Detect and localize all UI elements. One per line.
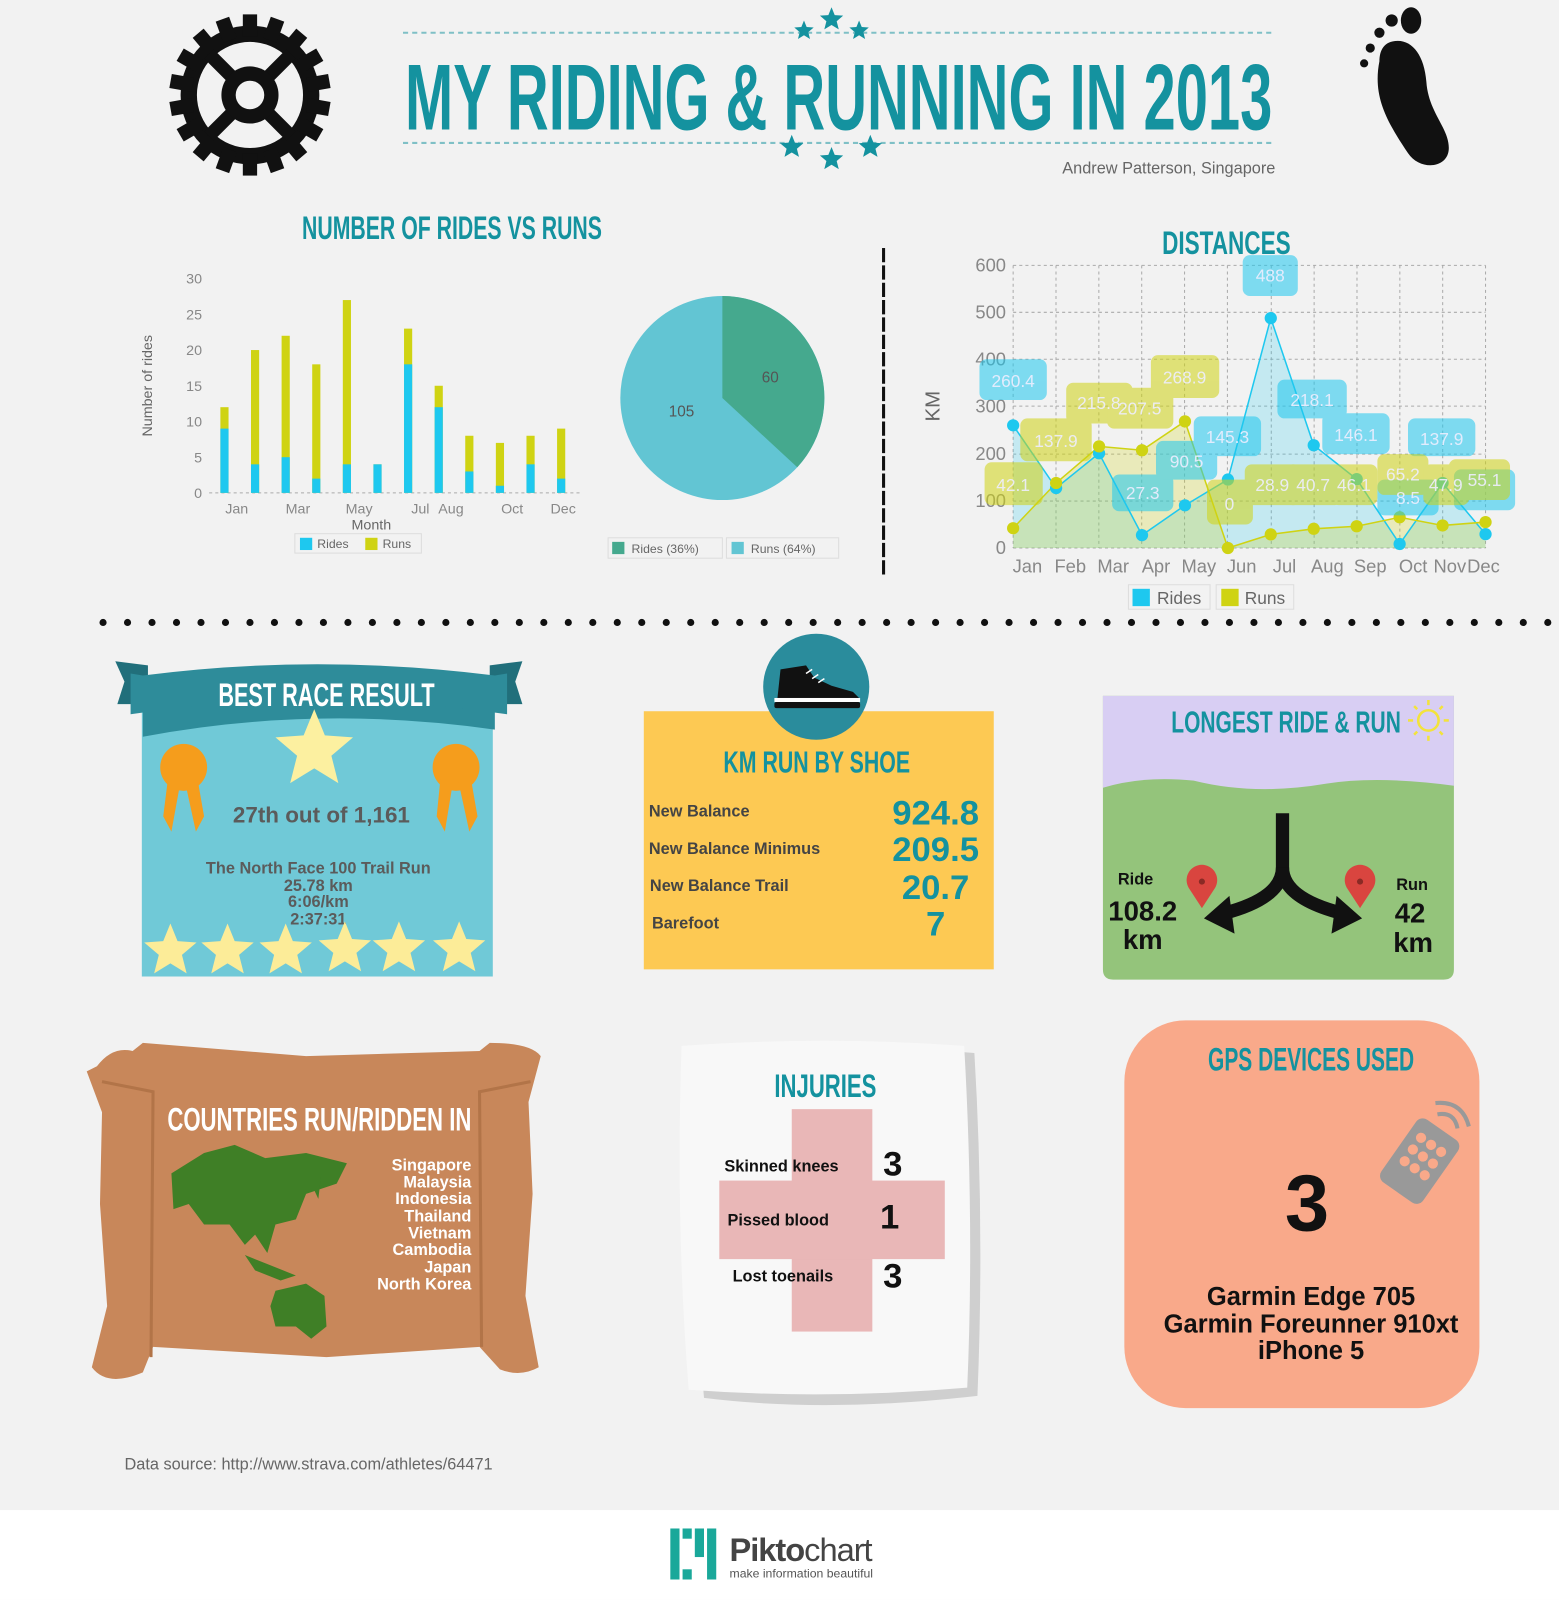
bar chart: Rides — [317, 537, 349, 551]
panel: gps devices — [1124, 1020, 1479, 1408]
icon: gear — [169, 14, 331, 176]
text: result: 27th out of 1,161 — [233, 802, 410, 827]
bar chart: May — [346, 501, 373, 517]
line chart: distances: 0 — [996, 537, 1006, 558]
panel: injuries: 3 — [883, 1258, 902, 1296]
line chart: distances: Dec — [1467, 555, 1500, 576]
line chart: distances: 137.9 — [1034, 431, 1078, 451]
bar chart: 10 — [186, 415, 202, 431]
arrow: fork — [1224, 813, 1342, 913]
icon: footprint — [1360, 7, 1449, 165]
panel: best race result — [115, 661, 522, 977]
panel: longest ride & run: km — [1123, 924, 1163, 955]
line chart: distances: 0 — [1225, 494, 1234, 514]
bar chart: 30 — [186, 272, 202, 288]
line chart: distances: 146.1 — [1334, 425, 1378, 445]
line chart: distances: 42.1 — [996, 475, 1030, 495]
line chart: distances: Sep — [1354, 555, 1387, 576]
banner — [115, 661, 522, 737]
bar chart: Month — [352, 518, 391, 534]
bar chart: Number of rides — [140, 335, 156, 437]
line chart: distances: Aug — [1311, 555, 1344, 576]
line chart: distances: Jun — [1227, 555, 1256, 576]
pie chart: 60 — [762, 370, 779, 387]
panel: best race result: 25.78 km — [284, 877, 353, 895]
panel: countries: Cambodia — [393, 1241, 472, 1259]
panel: gps devices: GPS DEVICES USED — [1208, 1040, 1414, 1077]
line chart: distances: 260.4 — [991, 371, 1035, 391]
panel: countries — [87, 1043, 541, 1379]
bar chart: Dec — [551, 501, 576, 517]
panel: countries: Singapore — [392, 1156, 471, 1174]
subtitle: author: Andrew Patterson, Singapore — [1062, 160, 1275, 178]
line chart: distances: Jan — [1013, 555, 1042, 576]
panel: countries: COUNTRIES RUN/RIDDEN IN — [167, 1101, 471, 1138]
icon: gps device — [1377, 1093, 1478, 1207]
line chart: distances: Jul — [1273, 555, 1296, 576]
line chart: distances: 400 — [975, 348, 1006, 369]
stars row — [144, 921, 485, 973]
line chart: distances: May — [1181, 555, 1217, 576]
line chart: distances: 200 — [975, 443, 1006, 464]
panel: countries: Indonesia — [395, 1190, 472, 1208]
panel: longest ride & run: 42 — [1395, 897, 1425, 928]
line chart: distances — [923, 254, 1515, 609]
panel: longest ride & run: 108.2 — [1108, 895, 1177, 926]
panel: injuries: Skinned knees — [724, 1157, 839, 1175]
heading: rides vs runs: NUMBER OF RIDES VS RUNS — [302, 209, 602, 246]
panel: countries: Japan — [424, 1258, 471, 1276]
panel: km run by shoe: 209.5 — [892, 831, 979, 869]
panel: countries: Vietnam — [408, 1225, 471, 1243]
icon: shoe — [763, 634, 869, 740]
icon: asia map — [171, 1145, 347, 1339]
panel: gps devices: iPhone 5 — [1258, 1337, 1364, 1365]
line chart: distances: 500 — [975, 301, 1006, 322]
bar chart: Aug — [438, 501, 464, 517]
icon: star — [275, 709, 353, 783]
panel: km run by shoe: New Balance Minimus — [649, 840, 820, 858]
line chart: distances: Apr — [1142, 555, 1170, 576]
pie chart: Rides (36%) — [632, 542, 699, 556]
panel: km run by shoe — [644, 634, 994, 969]
panel: countries: Malaysia — [403, 1174, 472, 1192]
logo: piktochart: make information beautiful — [730, 1566, 873, 1580]
bar chart: Jan — [225, 501, 248, 517]
panel: longest ride & run: km — [1393, 927, 1433, 958]
line chart: distances: Runs — [1245, 588, 1286, 608]
line chart: distances: 47.9 — [1429, 475, 1463, 495]
title — [403, 7, 1275, 169]
panel: longest ride & run: LONGEST RIDE & RUN — [1171, 706, 1401, 740]
line chart: distances: Feb — [1054, 555, 1086, 576]
line chart: distances: 46.1 — [1337, 475, 1371, 495]
line chart: distances: Rides — [1157, 588, 1202, 608]
bar chart: 20 — [186, 343, 202, 359]
panel: km run by shoe: KM RUN BY SHOE — [723, 745, 910, 779]
line chart: distances: 145.3 — [1206, 427, 1249, 447]
bar chart: 25 — [186, 307, 202, 323]
panel: longest ride & run: Run — [1396, 876, 1428, 894]
panel: countries: North Korea — [377, 1276, 472, 1294]
line chart: distances: 207.5 — [1118, 398, 1161, 418]
line chart: distances: 55.1 — [1468, 470, 1501, 490]
panel: km run by shoe: 924.8 — [892, 794, 979, 832]
panel: longest ride & run — [1103, 696, 1454, 980]
bar chart: 5 — [194, 450, 202, 466]
line chart: distances: 8.5 — [1396, 488, 1420, 508]
panel: km run by shoe: New Balance — [649, 802, 750, 820]
heading: distances: DISTANCES — [1162, 224, 1291, 261]
icon: cross — [719, 1109, 945, 1332]
pie chart: 105 — [669, 403, 694, 420]
line chart: distances: 488 — [1256, 266, 1285, 286]
line chart: distances: Oct — [1399, 555, 1427, 576]
bar chart: Oct — [501, 501, 523, 517]
panel: gps devices: Garmin Foreunner 910xt — [1164, 1311, 1459, 1339]
icon: sun — [1408, 700, 1449, 741]
panel: longest ride & run: Ride — [1118, 871, 1153, 889]
line chart: distances: 65.2 — [1386, 465, 1420, 485]
panel: injuries — [680, 1041, 980, 1405]
line chart: distances: 268.9 — [1163, 368, 1206, 388]
line chart: distances: 28.9 — [1255, 475, 1289, 495]
panel: injuries: INJURIES — [774, 1067, 876, 1104]
panel: km run by shoe: 7 — [926, 906, 945, 944]
panel: km run by shoe: Barefoot — [652, 915, 720, 933]
panel: countries: Thailand — [404, 1207, 471, 1225]
pie chart: Runs (64%) — [751, 542, 816, 556]
bar chart — [140, 272, 582, 553]
logo: piktochart: Piktochart — [730, 1531, 873, 1568]
panel: injuries: 3 — [883, 1145, 902, 1183]
line chart: distances: 300 — [975, 395, 1006, 416]
panel: gps devices: 3 — [1285, 1159, 1329, 1248]
panel: gps devices: Garmin Edge 705 — [1207, 1283, 1415, 1311]
line chart: distances: 600 — [975, 254, 1006, 275]
banner: BEST RACE RESULT — [218, 676, 435, 713]
footer: data source: Data source: http://www.strava.com/athletes/64471 — [124, 1455, 493, 1473]
icon: pins — [1187, 865, 1375, 908]
bar chart: 15 — [186, 379, 202, 395]
line chart: distances: 137.9 — [1420, 429, 1463, 449]
panel: km run by shoe: 20.7 — [902, 869, 969, 907]
logo: piktochart — [670, 1528, 873, 1580]
line chart: distances: 40.7 — [1296, 475, 1330, 495]
panel: best race result: The North Face 100 Trail Run — [206, 859, 431, 877]
panel: best race result: 2:37:31 — [290, 910, 346, 928]
panel: km run by shoe: New Balance Trail — [650, 877, 789, 895]
panel: best race result: 6:06/km — [288, 893, 349, 911]
line chart: distances: 27.3 — [1126, 483, 1160, 503]
panel: injuries: Pissed blood — [727, 1211, 829, 1229]
line chart: distances: 90.5 — [1170, 451, 1203, 471]
pie chart — [608, 296, 839, 558]
panel: injuries: 1 — [880, 1199, 899, 1237]
line chart: distances: Mar — [1097, 555, 1129, 576]
bar chart: Mar — [286, 501, 310, 517]
bar chart: Jul — [411, 501, 429, 517]
line chart: distances: 215.8 — [1077, 393, 1121, 413]
bar chart: Runs — [383, 537, 411, 551]
line chart: distances: 100 — [975, 490, 1006, 511]
panel: injuries: Lost toenails — [733, 1268, 833, 1286]
line chart: distances: 218.1 — [1290, 390, 1334, 410]
icon: rosettes — [160, 744, 480, 832]
bar chart: 0 — [194, 486, 202, 502]
line chart: distances: Nov — [1434, 555, 1467, 576]
line chart: distances: KM — [923, 391, 945, 421]
